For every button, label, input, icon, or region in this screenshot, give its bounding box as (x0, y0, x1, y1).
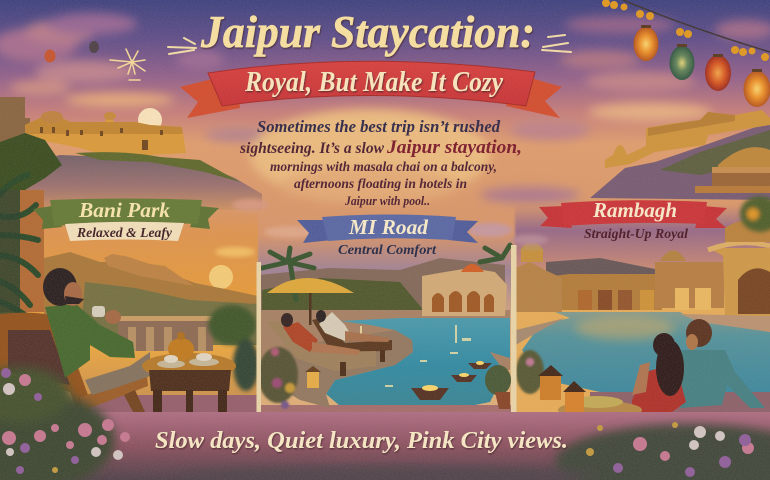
flower foreground (0, 367, 770, 480)
mottled cloud patches between panels (232, 199, 548, 245)
intro paragraph: mornings with masala chai on a balcony, (270, 160, 497, 175)
balcony balustrade (118, 316, 213, 351)
subtitle ribbon (180, 61, 562, 118)
panel: Bani Park scene (0, 175, 259, 425)
intro paragraph: Jaipur stayation, (386, 137, 522, 158)
orange tree corner (740, 196, 770, 232)
label: Bani Park (33, 198, 219, 241)
pool water (326, 318, 510, 413)
title flourishes (168, 35, 571, 54)
pool water (522, 312, 770, 392)
intro paragraph: afternoons floating in hotels in (294, 177, 467, 192)
palm tree (262, 245, 510, 300)
label: MI Road (297, 214, 478, 258)
subtitle ribbon: Royal, But Make It Cozy (244, 66, 503, 98)
umbrella (267, 278, 354, 325)
label: MI Road: Central Comfort (338, 243, 437, 258)
palm foliage (0, 175, 38, 315)
lanterns and tray (538, 365, 642, 419)
hot air balloons (44, 41, 99, 62)
label: Rambagh: Straight-Up Royal (584, 227, 688, 242)
terrace floor (85, 395, 258, 425)
label: Rambagh (539, 198, 727, 242)
couple (590, 319, 770, 420)
label: Rambagh: Rambagh (592, 198, 677, 222)
plant beside balcony (208, 305, 259, 391)
tagline: Slow days, Quiet luxury, Pink City views. (155, 428, 568, 454)
title: Jaipur Staycation: (200, 6, 535, 57)
sun loungers with couple (267, 310, 392, 376)
chai table (142, 332, 236, 423)
intro paragraph: sightseeing. It’s a slow (239, 140, 385, 157)
label: Bani Park: Bani Park (78, 198, 170, 222)
lantern and floating bowls (305, 361, 492, 400)
intro paragraph: Jaipur with pool.. (344, 194, 430, 208)
left fort on hill (0, 97, 262, 210)
label: Bani Park: Relaxed & Leafy (76, 226, 173, 241)
poolside plants (516, 350, 544, 394)
panel: MI Road pool scene (258, 235, 515, 419)
intro paragraph (239, 117, 522, 208)
man with chai (43, 268, 150, 395)
string of lanterns (602, 0, 770, 107)
chair (0, 313, 148, 415)
panel: Rambagh palace scene (515, 196, 770, 420)
fireworks (110, 49, 145, 80)
poolside flowers (258, 347, 298, 409)
sky clouds (0, 13, 770, 203)
intro paragraph: Sometimes the best trip isn’t rushed (257, 117, 501, 136)
label: MI Road: MI Road (348, 215, 429, 239)
panel dividers (256, 245, 516, 415)
right fort on hill (590, 110, 770, 200)
potted plant (485, 365, 511, 409)
